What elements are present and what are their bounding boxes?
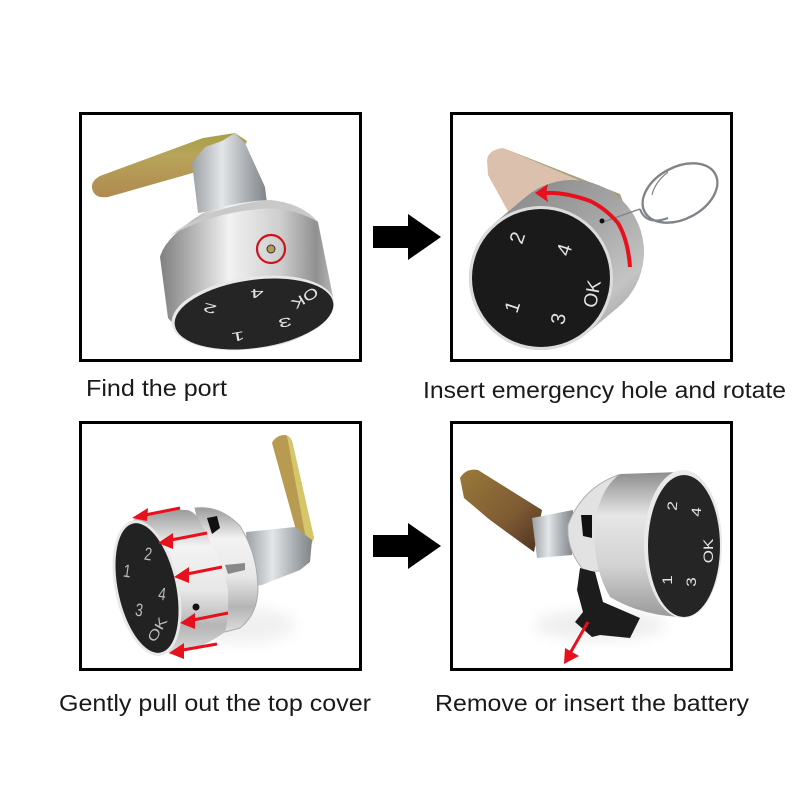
keypad face [167,266,339,360]
keypad digits: 3 [134,601,144,621]
caption: find the port: Find the port [86,375,228,401]
keypad digits: OK [145,615,171,645]
panel: insert emergency hole and rotate [452,114,732,360]
caption: remove or insert the battery: Remove or insert the battery [435,690,750,716]
keypad digits: 3 [684,577,700,587]
keypad face [469,206,613,350]
keypad digits: 2 [143,545,153,565]
lock body [160,200,333,349]
lock body [594,472,680,617]
keypad digits: 3 [277,314,293,330]
keypad digits: OK [701,538,717,563]
threaded stem [192,133,267,213]
lever [460,470,542,552]
lever [92,133,247,197]
keypad digits: 1 [122,562,132,582]
lock body [133,510,228,655]
panel: remove or insert the battery [452,422,732,670]
arrow: top row [373,214,441,260]
keypad digits [501,229,606,326]
keypad face [644,470,722,618]
threaded stem [246,527,312,587]
keypad digits: OK [288,283,322,313]
keypad digits: 2 [202,299,218,317]
emergency pin and ring [600,151,728,235]
keypad digits: 4 [157,585,167,605]
keypad digits [660,501,717,587]
keypad digits: OK [580,278,606,309]
threaded stem [532,510,573,558]
keypad digits: 4 [553,241,577,259]
battery clip [575,568,640,638]
red rotation arrow [535,184,630,267]
collar [568,475,618,572]
panel: pull out the top cover [80,422,360,670]
keypad digits [202,283,322,344]
lever [487,148,625,215]
emergency hole [192,604,200,610]
keypad face [101,514,193,662]
red pull arrows [132,508,228,659]
keypad digits: 2 [665,501,681,511]
lever [272,435,314,556]
keypad digits: 1 [660,575,676,585]
port highlight circle [257,235,285,263]
keypad digits: 3 [547,312,571,326]
red battery arrow [564,622,588,664]
collar [195,508,258,632]
caption: insert emergency hole and rotate: Insert emergency hole and rotate [423,377,786,403]
lock body [541,252,572,278]
caption: gently pull out the top cover: Gently pull out the top cover [59,690,371,716]
keypad digits [122,545,171,645]
panel: find the port [80,114,360,360]
keypad digits: 4 [250,286,264,300]
keypad digits: 4 [689,506,705,517]
keypad digits: 1 [501,298,525,316]
keypad digits: 2 [506,229,530,247]
keypad digits: 1 [230,328,246,344]
arrow: bottom row [373,523,441,569]
